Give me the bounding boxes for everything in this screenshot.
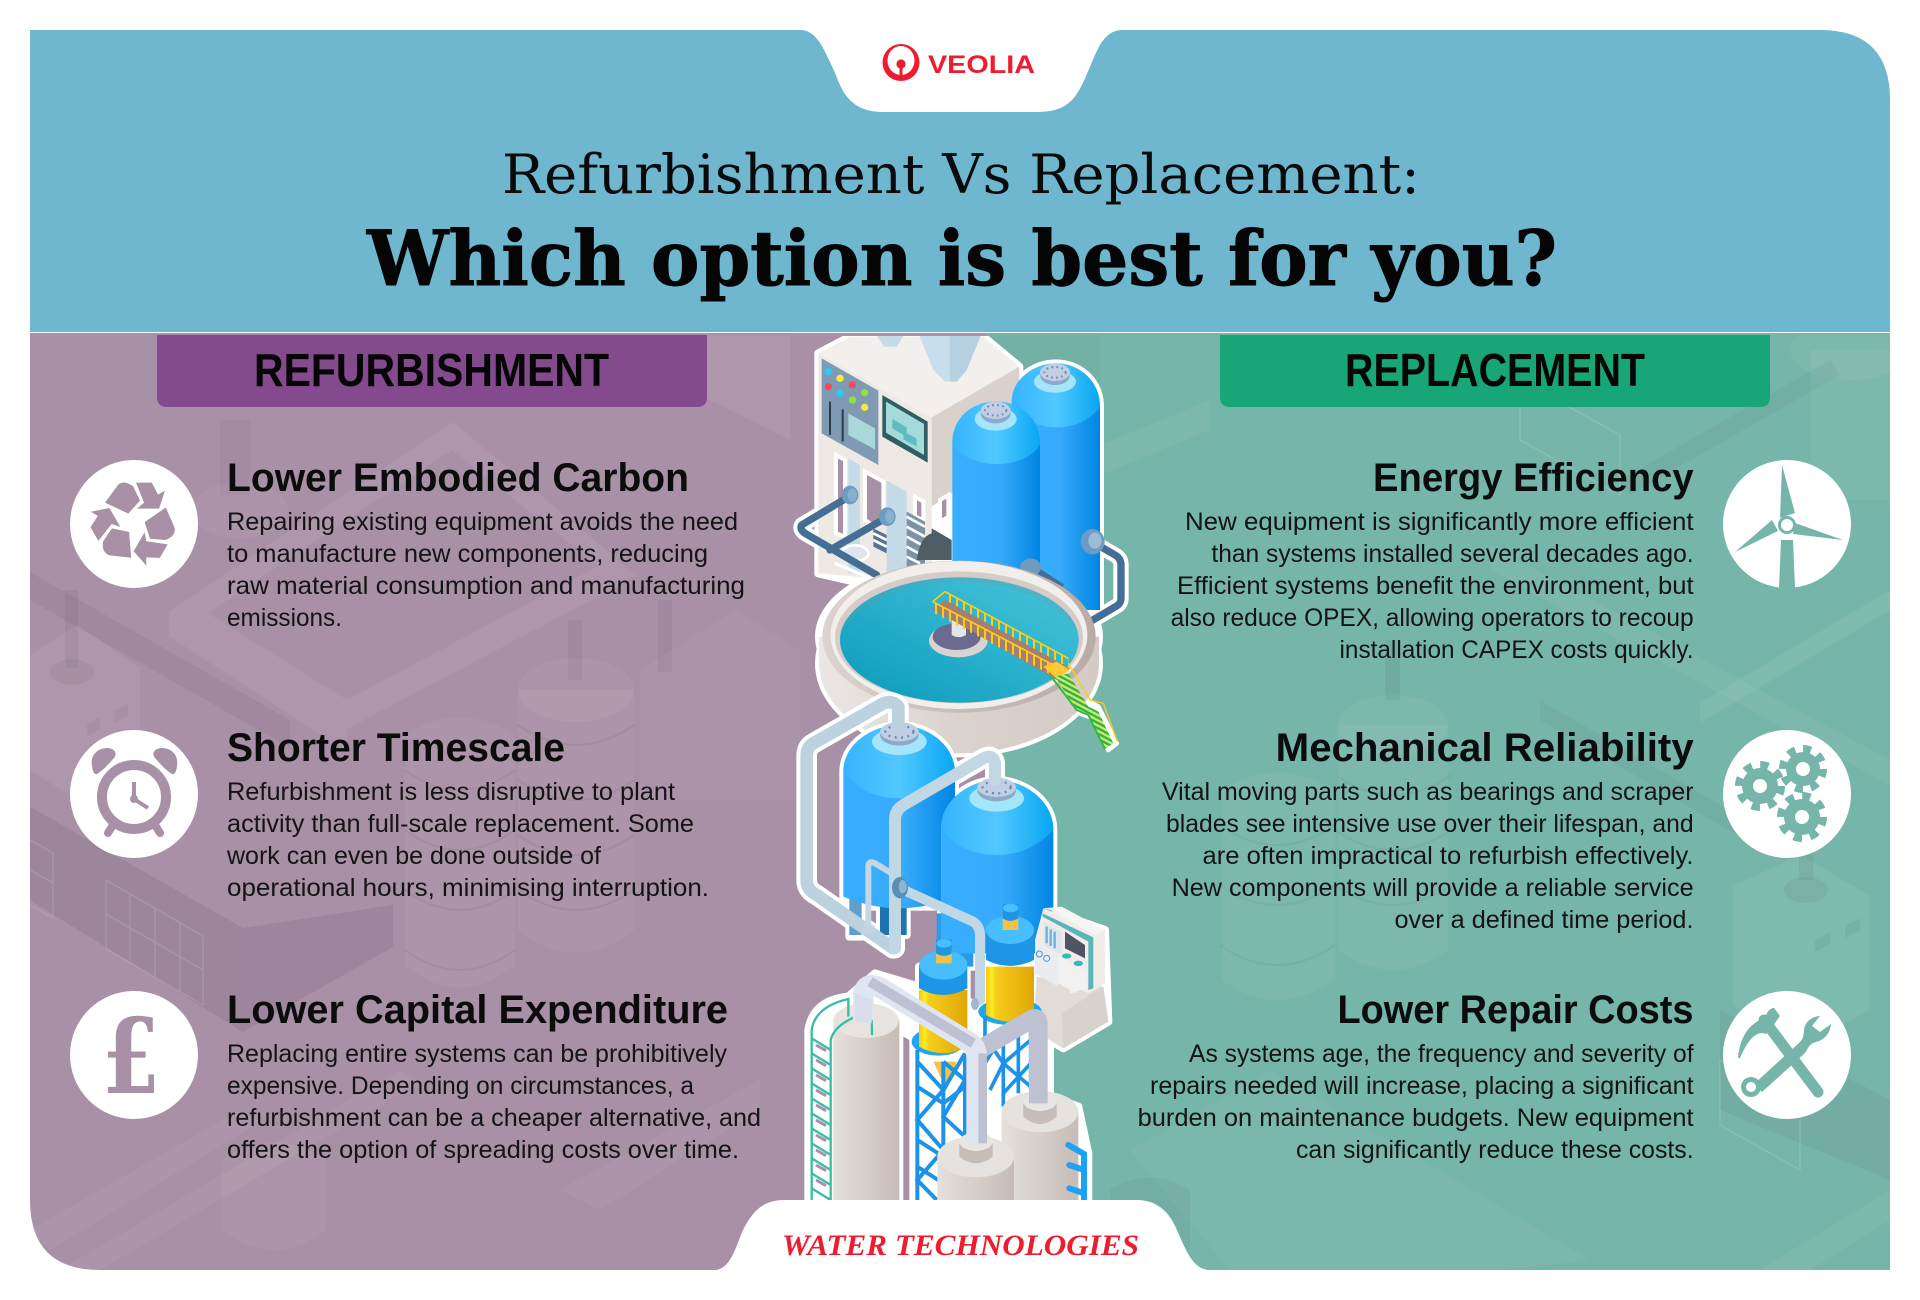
item: lower repair costs: repairs needed will increase, placing a significant (1150, 1072, 1694, 1100)
stairs (1050, 663, 1117, 749)
hex caps (959, 1102, 1057, 1164)
item: energy efficiency: than systems installed several decades ago. (1211, 540, 1694, 568)
front tank (952, 402, 1040, 583)
item: lower capital expenditure (227, 988, 761, 1164)
icon: recycle (70, 460, 198, 588)
tab: replacement (1220, 335, 1770, 407)
icon: gears (1723, 730, 1851, 858)
item: lower embodied carbon: emissions. (227, 604, 342, 632)
item: shorter timescale: activity than full-scale replacement. Some (227, 810, 694, 838)
item: shorter timescale: work can even be done outside of (226, 842, 601, 870)
clarifier tank (819, 561, 1099, 753)
title: main line: Which option is best for you? (366, 214, 1557, 303)
item: energy efficiency: also reduce OPEX, allowing operators to recoup (1171, 604, 1694, 632)
item: mechanical reliability: New components will provide a reliable service (1172, 874, 1694, 902)
upper plant: cabinet, blue tanks and clarifier (801, 333, 1121, 753)
back vessel (843, 722, 955, 935)
scraper bridge (932, 592, 1070, 680)
item: mechanical reliability: Mechanical Reliability (1276, 726, 1694, 770)
header banner (30, 30, 1890, 332)
middle column (937, 1136, 1014, 1200)
item: lower repair costs: As systems age, the frequency and severity of (1189, 1040, 1694, 1068)
item: lower embodied carbon: to manufacture new components, reducing (227, 540, 708, 568)
back tank (1012, 363, 1100, 610)
tab: replacement: REPLACEMENT (1345, 344, 1645, 396)
item: energy efficiency: Efficient systems benefit the environment, but (1177, 572, 1694, 600)
background pattern: refurbishment isometric plant (30, 320, 1910, 1270)
item: lower repair costs: burden on maintenance budgets. New equipment (1138, 1104, 1694, 1132)
item: shorter timescale: Refurbishment is less disruptive to plant (227, 778, 675, 806)
front vessel (937, 778, 1053, 967)
item: lower capital expenditure: refurbishment can be a cheaper alternative, and (227, 1104, 761, 1132)
item: lower repair costs: can significantly reduce these costs. (1296, 1136, 1694, 1164)
logo: Veolia (882, 44, 1035, 81)
icon: pound sign: £ (102, 995, 160, 1118)
item: lower embodied carbon: raw material consumption and manufacturing (227, 572, 745, 600)
pipe A (807, 702, 898, 948)
icon: pound sign (70, 991, 198, 1119)
item: mechanical reliability: Vital moving parts such as bearings and scraper (1162, 778, 1694, 806)
right column (1002, 1091, 1078, 1200)
item: lower embodied carbon: Repairing existing equipment avoids the need (227, 508, 738, 536)
panel: replacement background (985, 333, 1890, 1270)
gap between column and lattice (903, 1037, 909, 1200)
item: lower embodied carbon: Lower Embodied Carbon (227, 456, 689, 500)
item: lower embodied carbon (227, 456, 745, 632)
ladder (812, 999, 872, 1200)
blue handle (1068, 1145, 1084, 1200)
item: energy efficiency: installation CAPEX costs quickly. (1340, 636, 1694, 664)
item: mechanical reliability: over a defined time period. (1394, 906, 1694, 934)
item: mechanical reliability (1162, 726, 1694, 934)
item: lower capital expenditure: offers the option of spreading costs over time. (227, 1136, 739, 1164)
control panel (1033, 907, 1108, 1048)
lattice front (917, 1050, 965, 1200)
item: energy efficiency (1171, 456, 1694, 664)
pipes B, C, D (861, 757, 995, 1010)
dark blue pipes (801, 495, 888, 575)
item: shorter timescale (226, 726, 709, 902)
item: lower repair costs: Lower Repair Costs (1338, 988, 1694, 1032)
item: energy efficiency: New equipment is significantly more efficient (1185, 508, 1694, 536)
footer notch: water technologies: WATER TECHNOLOGIES (782, 1229, 1139, 1262)
item: lower repair costs (1138, 988, 1694, 1164)
tab: refurbishment: REFURBISHMENT (254, 344, 609, 396)
right dark pipe (1020, 529, 1121, 622)
cartridge right (986, 904, 1034, 1022)
item: mechanical reliability: are often impractical to refurbish effectively. (1202, 842, 1694, 870)
item: lower capital expenditure: Replacing entire systems can be prohibitively (227, 1040, 727, 1068)
logo: Veolia: VEOLIA (928, 51, 1035, 79)
icon: hammer and wrench (1723, 991, 1851, 1119)
tab: refurbishment (157, 335, 707, 407)
panel: refurbishment background (30, 333, 985, 1270)
item: mechanical reliability: blades see intensive use over their lifespan, and (1166, 810, 1694, 838)
cabinet (818, 337, 1019, 583)
left column (833, 1003, 899, 1200)
title: subtitle line: Refurbishment Vs Replacement: (502, 143, 1420, 206)
icon: wind turbine (1723, 460, 1851, 588)
item: shorter timescale: operational hours, minimising interruption. (227, 874, 709, 902)
item: lower capital expenditure: Lower Capital Expenditure (227, 988, 728, 1032)
pipe flanges (842, 486, 896, 526)
lattice towers (912, 998, 1042, 1107)
icon: alarm clock (70, 730, 198, 858)
lower plant: pressure vessels, cartridges, columns (807, 702, 1108, 1200)
item: energy efficiency: Energy Efficiency (1373, 456, 1694, 500)
item: shorter timescale: Shorter Timescale (227, 726, 565, 770)
cartridge left (919, 939, 967, 1090)
illustration: water treatment plant (801, 333, 1121, 1200)
funnels (875, 333, 982, 382)
footer notch: water technologies (0, 1200, 1920, 1300)
item: lower capital expenditure: expensive. Depending on circumstances, a (227, 1072, 694, 1100)
grey manifold (855, 982, 1038, 1143)
